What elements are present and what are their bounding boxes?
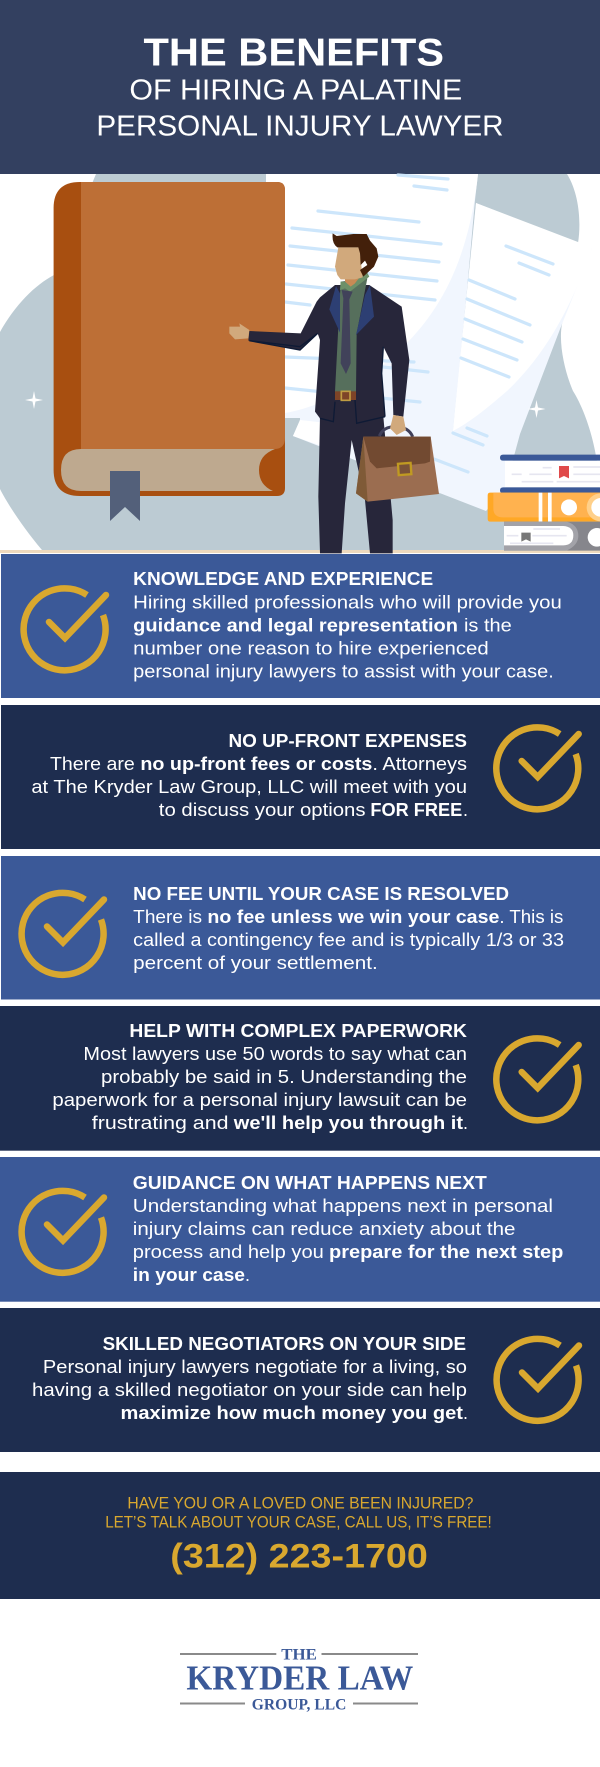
icon: check mark — [497, 1339, 579, 1421]
body text: . — [245, 1265, 250, 1285]
ground line — [0, 550, 600, 553]
body text: called a contingency fee and is typically 1/3 or 33 — [133, 930, 564, 950]
icon: check mark — [22, 1191, 104, 1273]
icon: check mark — [24, 588, 106, 670]
icon: check mark — [496, 1038, 579, 1120]
title: OF HIRING A PALATINE — [129, 74, 462, 106]
heading: NO FEE UNTIL YOUR CASE IS RESOLVED — [133, 883, 509, 904]
body text: we'll help you through it — [233, 1113, 463, 1133]
body text: no fee unless we win your case — [207, 907, 499, 927]
panel: help with complex paperwork — [0, 1006, 600, 1151]
title: THE BENEFITS — [144, 31, 444, 74]
body text: is the — [464, 616, 512, 636]
call to action text: HAVE YOU OR A LOVED ONE BEEN INJURED? — [127, 1495, 473, 1513]
body text: having a skilled negotiator on your side can help — [32, 1380, 467, 1400]
heading: SKILLED NEGOTIATORS ON YOUR SIDE — [103, 1333, 466, 1354]
panel: guidance on what happens next — [0, 1157, 600, 1302]
illustration: lawyer with book and papers — [0, 174, 600, 553]
body text: in your case — [133, 1265, 245, 1285]
body text: guidance and legal representation — [133, 616, 458, 636]
panel: knowledge and experience — [1, 554, 600, 698]
header banner — [0, 0, 600, 174]
body text: percent of your settlement. — [133, 953, 378, 973]
logo: The Kryder Law Group, LLC: THE — [281, 1646, 317, 1663]
lawyer figure — [229, 233, 439, 553]
body text: frustrating and — [92, 1113, 228, 1133]
background blobs — [0, 174, 600, 550]
bookmark — [110, 471, 140, 521]
body text: . — [463, 800, 468, 820]
body text: Personal injury lawyers negotiate for a living, so — [43, 1357, 467, 1377]
heading: HELP WITH COMPLEX PAPERWORK — [129, 1020, 468, 1041]
logo: The Kryder Law Group, LLC: GROUP, LLC — [252, 1697, 346, 1714]
book — [54, 182, 285, 521]
logo: The Kryder Law Group, LLC — [180, 1646, 418, 1714]
title — [96, 31, 504, 143]
body text: Most lawyers use 50 words to say what can — [83, 1044, 467, 1064]
body text — [133, 907, 564, 973]
panel: skilled negotiators on your side — [0, 1308, 600, 1452]
call to action text: LET’S TALK ABOUT YOUR CASE, CALL US, IT’S FREE! — [105, 1514, 492, 1532]
panel: no up-front expenses — [1, 705, 600, 849]
body text: number one reason to hire experienced — [133, 639, 489, 659]
body text: There is — [133, 907, 202, 927]
title: PERSONAL INJURY LAWYER — [96, 111, 504, 143]
body text: injury claims can reduce anxiety about the — [133, 1219, 516, 1239]
body text — [133, 1196, 563, 1285]
body text: Understanding what happens next in personal — [133, 1196, 553, 1216]
body text: process and help you — [133, 1242, 324, 1262]
icon: check mark — [496, 727, 579, 809]
body text: to discuss your options — [159, 800, 366, 820]
papers — [266, 174, 592, 511]
body text — [31, 754, 468, 820]
body text: maximize how much money you get — [120, 1403, 463, 1423]
body text: There are — [50, 754, 135, 774]
panel: no fee until your case is resolved — [1, 856, 600, 1000]
phone number: (312) 223-1700 — [170, 1538, 428, 1576]
body text: prepare for the next step — [329, 1242, 563, 1262]
body text: . — [463, 1113, 468, 1133]
body text: no up-front fees or costs — [140, 754, 372, 774]
body text: probably be said in 5. Understanding the — [101, 1067, 467, 1087]
heading: KNOWLEDGE AND EXPERIENCE — [133, 568, 433, 589]
briefcase — [356, 437, 439, 502]
body text: paperwork for a personal injury lawsuit can be — [52, 1090, 467, 1110]
icon: check mark — [22, 893, 104, 975]
body text — [32, 1357, 468, 1423]
body text: . This is — [499, 907, 563, 927]
heading: NO UP-FRONT EXPENSES — [228, 730, 467, 751]
body text — [133, 592, 562, 682]
body text: Hiring skilled professionals who will provide you — [133, 592, 562, 612]
heading: GUIDANCE ON WHAT HAPPENS NEXT — [133, 1172, 488, 1193]
stack of books — [488, 455, 600, 551]
call to action text — [105, 1495, 492, 1532]
call to action panel — [0, 1472, 600, 1599]
icon: sparkles — [25, 391, 546, 418]
body text: personal injury lawyers to assist with your case. — [133, 662, 554, 682]
body text — [52, 1044, 468, 1133]
logo: The Kryder Law Group, LLC: KRYDER LAW — [186, 1658, 413, 1697]
body text: FOR FREE — [370, 799, 462, 820]
body text: . Attorneys — [372, 754, 467, 774]
body text: at The Kryder Law Group, LLC will meet with you — [31, 777, 467, 797]
body text: . — [463, 1403, 468, 1423]
